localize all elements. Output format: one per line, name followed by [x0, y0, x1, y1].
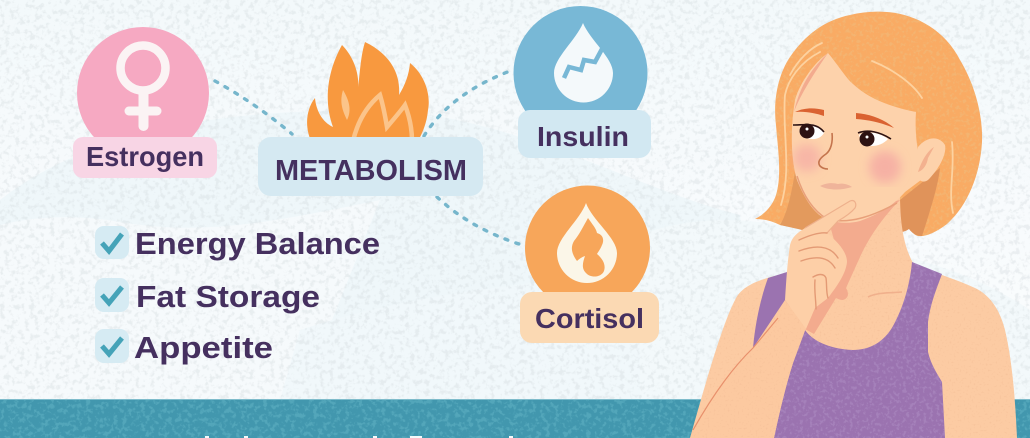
icon: flame drop	[557, 203, 617, 283]
insulin label box	[518, 110, 651, 158]
mouth	[820, 183, 852, 190]
face	[792, 53, 921, 223]
item: fat storage: Fat Storage	[136, 279, 320, 314]
cortisol label box	[520, 292, 659, 343]
woman illustration	[690, 12, 1017, 438]
item: energy balance: Energy Balance	[135, 226, 380, 261]
metabolism label box	[258, 137, 483, 196]
insulin node	[514, 6, 651, 158]
neck shadow	[803, 200, 900, 334]
collarbone	[868, 292, 902, 297]
estrogen circle	[77, 27, 209, 159]
bottom teal band	[0, 399, 1030, 438]
icon: flame	[307, 42, 429, 141]
hand	[785, 201, 856, 329]
left eye	[793, 124, 824, 139]
insulin label: Insulin	[537, 121, 629, 152]
hair shadow left	[780, 172, 840, 236]
icon: cracked drop	[554, 23, 613, 102]
metabolism label: METABOLISM	[275, 155, 467, 187]
ear	[916, 138, 945, 182]
pointing finger outline	[805, 201, 856, 233]
right eyebrow	[856, 113, 894, 128]
connector: estrogen to metabolism	[215, 81, 292, 134]
hairline shadow on face	[794, 53, 828, 112]
arm crease	[693, 318, 778, 430]
jaw line	[797, 176, 897, 221]
cortisol node	[520, 186, 659, 343]
left strap	[753, 272, 790, 348]
estrogen label: Estrogen	[86, 141, 204, 172]
item: appetite	[95, 329, 273, 365]
metabolism node	[258, 42, 483, 196]
left eyebrow	[795, 108, 824, 116]
connector: metabolism to cortisol	[437, 197, 519, 244]
nose	[819, 133, 832, 169]
checklist	[95, 226, 380, 365]
cortisol label: Cortisol	[535, 303, 644, 334]
cropped tops of the cut-off band text	[205, 436, 513, 438]
insulin circle	[514, 6, 648, 140]
forearm	[690, 300, 806, 438]
connector: insulin to metabolism	[424, 71, 510, 136]
estrogen label box	[73, 137, 217, 178]
hair shadow right	[900, 168, 940, 236]
icon: venus symbol	[120, 46, 166, 126]
estrogen node	[73, 27, 217, 178]
finger lines	[799, 233, 838, 309]
purple tank top	[774, 262, 945, 438]
hair highlights	[781, 43, 953, 213]
shoulders, neck and torso skin	[690, 195, 1017, 438]
item: appetite: Appetite	[134, 330, 273, 365]
right eye	[858, 131, 891, 146]
cortisol circle	[525, 186, 650, 310]
blush	[793, 144, 901, 183]
hair	[755, 12, 982, 236]
